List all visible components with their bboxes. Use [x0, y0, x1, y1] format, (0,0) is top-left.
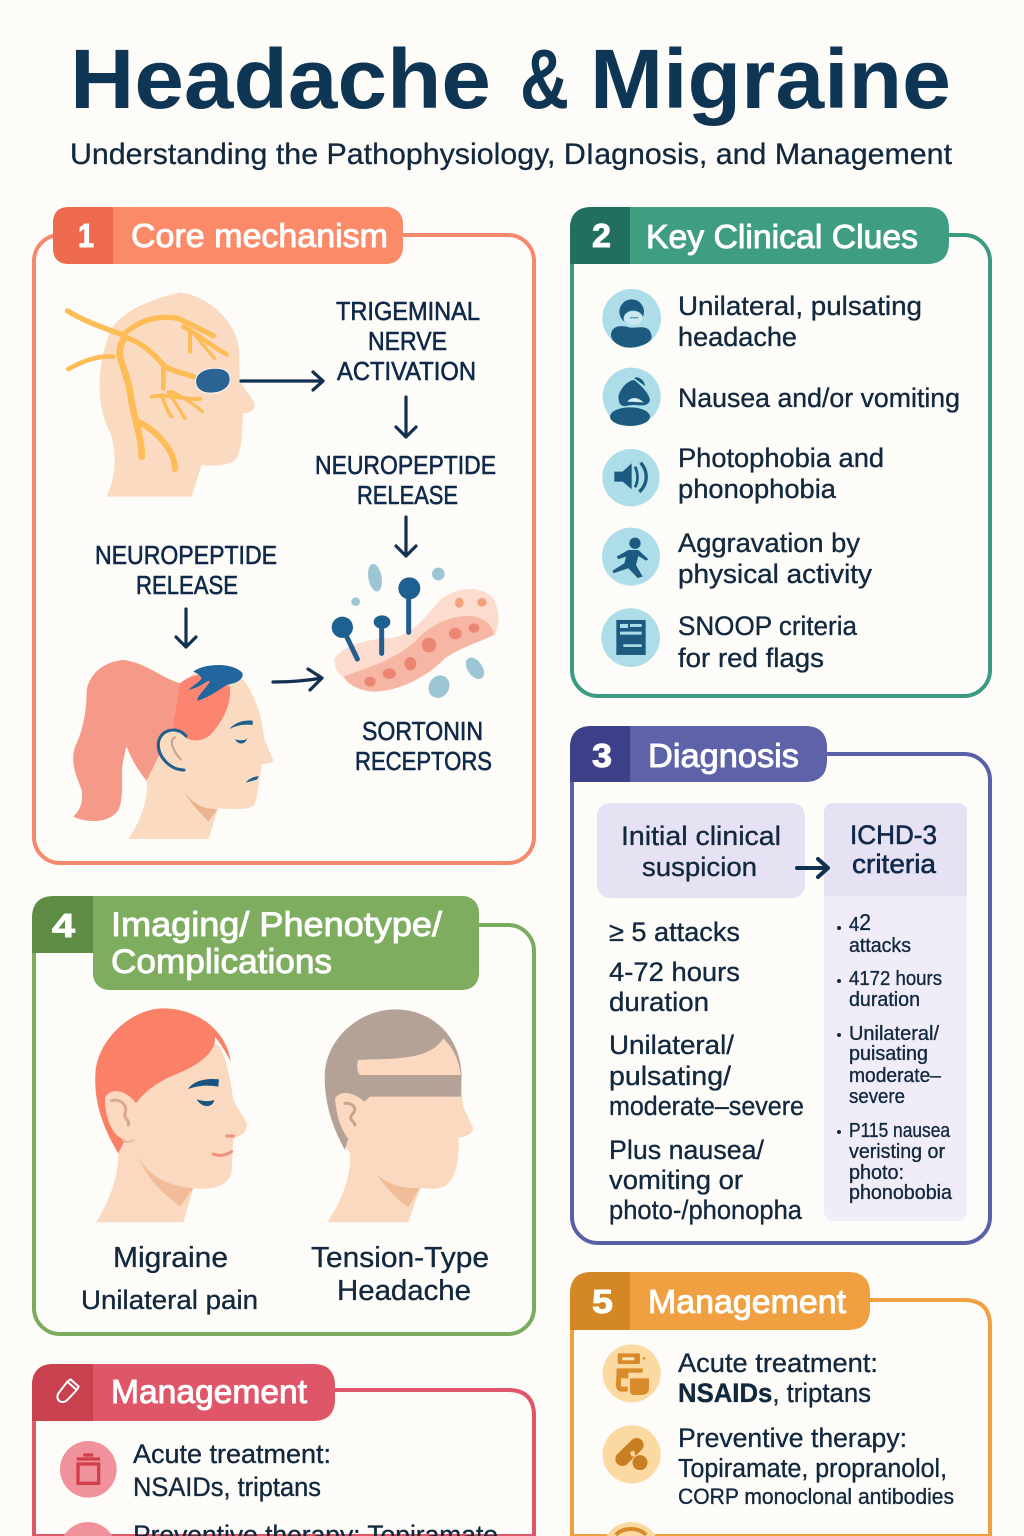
criteria list: veristing or	[849, 1141, 945, 1163]
header: key clinical clues	[570, 207, 949, 264]
header: imaging phenotype complications: 4	[52, 907, 76, 944]
criteria list: phonobobia	[849, 1182, 953, 1204]
icon: capsule	[603, 1425, 661, 1483]
item: acute treatment red	[60, 1439, 331, 1502]
title: Migraine	[590, 32, 951, 126]
clue: snoop criteria: SNOOP criteria	[678, 611, 857, 641]
illustration: serotonin receptors on membrane	[332, 563, 499, 702]
icon: pill bottle	[57, 1379, 79, 1402]
illustration: tension-type head	[325, 1009, 473, 1222]
list: diagnostic features	[609, 917, 804, 1225]
box: initial clinical suspicion: suspicion	[642, 852, 757, 882]
clue: photophobia and phonophobia: phonophobia	[678, 474, 836, 504]
list: diagnostic features: vomiting or	[609, 1165, 743, 1195]
illustration: head with trigeminal nerve	[68, 292, 255, 497]
criteria list: severe	[849, 1086, 905, 1108]
item: acute treatment orange: Acute treatment:	[678, 1348, 878, 1378]
clue: snoop criteria	[601, 608, 857, 673]
list: diagnostic features: moderate–severe	[609, 1091, 804, 1121]
text: neuropeptide release right	[315, 450, 496, 510]
arrow: suspicion to criteria	[797, 859, 828, 877]
criteria list: puisating	[849, 1043, 928, 1065]
arrow: release to receptors	[396, 517, 416, 556]
criteria list: 2	[859, 909, 871, 935]
text: neuropeptide release left: RELEASE	[136, 570, 238, 600]
text: trigeminal nerve activation: ACTIVATION	[337, 356, 476, 386]
header: diagnosis: Diagnosis	[648, 737, 799, 774]
item: acute treatment red: NSAIDs, triptans	[133, 1472, 321, 1502]
clue: nausea and vomiting: Nausea and/or vomiting	[678, 383, 960, 413]
arrow: release to head	[176, 609, 196, 647]
text: neuropeptide release left	[95, 540, 277, 600]
clue: aggravation by physical activity: physical activity	[678, 559, 873, 589]
header: imaging phenotype complications: Complications	[111, 943, 332, 981]
list: diagnostic features: photo-/phonopha	[609, 1195, 803, 1225]
criteria list: photo:	[849, 1162, 904, 1184]
icon: nausea	[603, 368, 661, 426]
text: neuropeptide release left: NEUROPEPTIDE	[95, 540, 277, 570]
criteria list: attacks	[849, 935, 911, 957]
panel: management red	[32, 1364, 534, 1536]
text: sortonin receptors: RECEPTORS	[355, 746, 492, 776]
header: management red: Management	[111, 1373, 307, 1410]
panel: management orange	[570, 1272, 990, 1536]
criteria list: Unilateral/	[849, 1023, 939, 1045]
list: diagnostic features: duration	[609, 987, 709, 1017]
text: trigeminal nerve activation	[336, 296, 480, 386]
criteria list: 4172 hours	[849, 968, 942, 990]
criteria list: duration	[849, 989, 920, 1011]
list: diagnostic features: Unilateral/	[609, 1030, 735, 1060]
clue: aggravation by physical activity	[602, 528, 873, 589]
header: management orange	[570, 1272, 870, 1330]
header: management red	[32, 1364, 335, 1421]
label: tension-type headache: Tension-Type	[311, 1242, 489, 1274]
header: core mechanism: 1	[78, 217, 94, 254]
header: imaging phenotype complications	[32, 896, 479, 990]
panel: diagnosis	[570, 726, 990, 1243]
criteria list	[837, 909, 953, 1204]
column: ICHD-3 criteria: ICHD-3	[850, 820, 937, 850]
clue: aggravation by physical activity: Aggravation by	[678, 528, 861, 558]
column: ICHD-3 criteria	[824, 803, 967, 1221]
icon: pill jar	[60, 1441, 117, 1498]
item: acute treatment red: Acute treatment:	[133, 1439, 331, 1469]
clue: unilateral pulsating headache: headache	[678, 322, 797, 352]
icon: document	[601, 608, 660, 667]
item: preventive therapy orange	[603, 1423, 954, 1509]
list: diagnostic features: 4-72 hours	[609, 957, 740, 987]
clue: photophobia and phonophobia: Photophobia and	[678, 443, 884, 473]
label: tension-type headache: Headache	[337, 1275, 471, 1307]
arrow: head to receptors	[273, 669, 322, 690]
header: diagnosis	[570, 726, 827, 782]
item: preventive therapy orange: CORP monoclonal antibodies	[678, 1484, 954, 1509]
icon: medicine bottle	[603, 1344, 661, 1402]
list: diagnostic features: ≥ 5 attacks	[609, 917, 740, 947]
icon: running figure	[602, 528, 660, 586]
header: management orange: Management	[648, 1283, 846, 1320]
panel: key clinical clues	[570, 207, 990, 696]
list: diagnostic features: pulsating/	[609, 1061, 732, 1091]
illustration: migraine head	[95, 1008, 247, 1222]
header: management orange: 5	[592, 1283, 613, 1320]
header: diagnosis: 3	[592, 737, 612, 774]
subtitle: Understanding the Pathophysiology, DIagnosis, and Management	[70, 138, 953, 171]
label: migraine: Unilateral pain	[81, 1285, 258, 1315]
text: neuropeptide release right: NEUROPEPTIDE	[315, 450, 496, 480]
arrow: nerve to activation	[241, 372, 323, 390]
text: sortonin receptors: SORTONIN	[362, 716, 483, 746]
clue: unilateral pulsating headache: Unilateral, pulsating	[678, 291, 922, 321]
criteria list: moderate–	[849, 1065, 942, 1087]
list: diagnostic features: Plus nausea/	[609, 1135, 764, 1165]
illustration: head with ponytail	[73, 660, 273, 839]
text: trigeminal nerve activation: NERVE	[368, 326, 447, 356]
column: ICHD-3 criteria: criteria	[852, 849, 937, 879]
panel: imaging phenotype complications	[32, 896, 534, 1334]
clue: nausea and vomiting	[603, 368, 960, 426]
icon: head with pain	[602, 289, 661, 348]
header: core mechanism: Core mechanism	[131, 217, 388, 254]
label: migraine: Migraine	[113, 1242, 228, 1274]
icon: circle	[64, 1522, 112, 1536]
clue: snoop criteria: for red flags	[678, 643, 824, 673]
header: imaging phenotype complications: Imaging/ Phenotype/	[111, 906, 443, 944]
header: core mechanism	[53, 207, 403, 264]
header: key clinical clues: 2	[592, 217, 611, 254]
text: sortonin receptors	[355, 716, 492, 776]
item: acute treatment orange: NSAIDs, triptans	[678, 1378, 871, 1408]
clue: photophobia and phonophobia	[602, 443, 884, 506]
title	[70, 32, 951, 126]
icon: sound waves	[602, 449, 660, 506]
label: tension-type headache	[311, 1242, 489, 1307]
header: key clinical clues: Key Clinical Clues	[646, 218, 918, 255]
arrow: activation to release	[396, 397, 416, 437]
box: initial clinical suspicion: Initial clinical	[621, 821, 781, 851]
criteria list: 4	[849, 914, 860, 936]
clue: unilateral pulsating headache	[602, 289, 922, 352]
box: initial clinical suspicion	[597, 803, 805, 898]
text: neuropeptide release right: RELEASE	[357, 480, 458, 510]
criteria list: P115 nausea	[849, 1120, 951, 1142]
panel: core mechanism	[34, 207, 534, 863]
label: migraine	[81, 1242, 258, 1315]
title: &	[520, 32, 569, 126]
title: Headache	[70, 32, 491, 126]
icon: third item circle	[606, 1522, 656, 1536]
item: acute treatment orange	[603, 1344, 878, 1408]
item: preventive therapy orange: Topiramate, propranolol,	[678, 1455, 947, 1483]
text: trigeminal nerve activation: TRIGEMINAL	[336, 296, 480, 326]
item: preventive therapy orange: Preventive therapy:	[678, 1423, 907, 1453]
